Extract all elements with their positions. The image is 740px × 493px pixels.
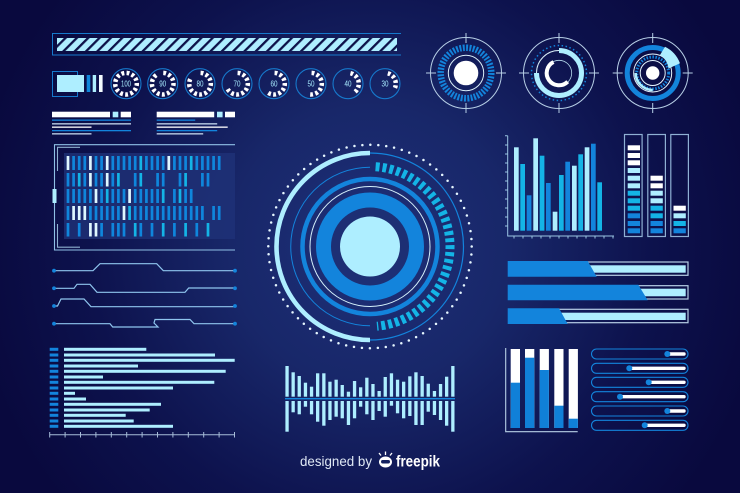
- lower bars: [285, 401, 454, 432]
- dial 50: 50: [308, 80, 315, 89]
- row markers: [50, 348, 58, 428]
- slider 3: [592, 377, 688, 387]
- thick light arc: [276, 153, 370, 340]
- radar ring 1: [426, 33, 506, 113]
- slider 4: [592, 392, 688, 402]
- thin left arc: [291, 167, 370, 326]
- text placeholder block left: [52, 112, 131, 134]
- blue disc: [316, 192, 424, 300]
- slider 6: [592, 420, 688, 430]
- dial 50: [296, 69, 326, 99]
- slider 1: [592, 349, 688, 359]
- circuit end nodes: [52, 269, 237, 326]
- dotted outer ring: [268, 145, 472, 348]
- stacked bar chart: [506, 348, 578, 432]
- dial 90: 90: [159, 80, 167, 89]
- dial 100: [111, 69, 141, 99]
- level meter column 1: [624, 134, 642, 236]
- circuit lines: [52, 264, 237, 327]
- tick arc: [376, 167, 450, 326]
- light core: [340, 216, 400, 276]
- dial 70: [222, 69, 252, 99]
- horizontal progress bar 1: [508, 261, 688, 277]
- blue ring: [302, 179, 438, 314]
- bars: [514, 138, 602, 231]
- box and level bars icon: [52, 72, 103, 96]
- axes: [505, 136, 614, 238]
- vertical bar chart: [505, 136, 614, 238]
- center line: [285, 398, 455, 399]
- bars: [64, 348, 235, 428]
- slider 5: [592, 406, 688, 416]
- text placeholder block right: [157, 112, 235, 134]
- dial 70: 70: [234, 80, 241, 89]
- dark disc: [331, 208, 409, 286]
- white ring: [310, 186, 430, 306]
- dial 60: 60: [270, 80, 278, 89]
- dial 30: [370, 69, 400, 99]
- row 4: [68, 206, 219, 220]
- horizontal progress bar 2: [508, 285, 688, 300]
- row 1: [68, 156, 219, 170]
- horizontal bar list: [50, 348, 235, 438]
- level meter column 2: [648, 134, 665, 236]
- dial 100: 100: [121, 80, 131, 89]
- audio waveform: [285, 366, 455, 432]
- dial 40: 40: [344, 80, 352, 89]
- footer credit: freepik: [396, 454, 440, 470]
- dial 30: 30: [382, 80, 389, 89]
- row 2: [68, 173, 208, 186]
- row 5: [68, 223, 208, 236]
- icon: freepik mascot: [379, 452, 392, 468]
- slider list: [592, 349, 688, 430]
- slider 2: [592, 363, 688, 373]
- central radial gauge: [268, 145, 472, 348]
- percentage dials: [111, 69, 400, 99]
- horizontal progress bar 3: [508, 308, 688, 324]
- dial 80: 80: [196, 80, 204, 89]
- upper bars: [285, 366, 454, 397]
- axis: [50, 432, 235, 438]
- thin right arc: [370, 153, 464, 340]
- dial 90: [148, 69, 178, 99]
- row 3: [68, 189, 191, 203]
- radar ring 3: [613, 33, 693, 113]
- footer credit: [300, 452, 440, 470]
- footer credit: designed by: [300, 454, 372, 469]
- radar ring 2: [519, 33, 599, 113]
- dial 60: [259, 69, 289, 99]
- level meter column 3: [671, 134, 688, 236]
- striped progress bar: [52, 34, 401, 55]
- dial 80: [185, 69, 215, 99]
- dial 40: [333, 69, 363, 99]
- data panel with bar rows: [52, 145, 235, 250]
